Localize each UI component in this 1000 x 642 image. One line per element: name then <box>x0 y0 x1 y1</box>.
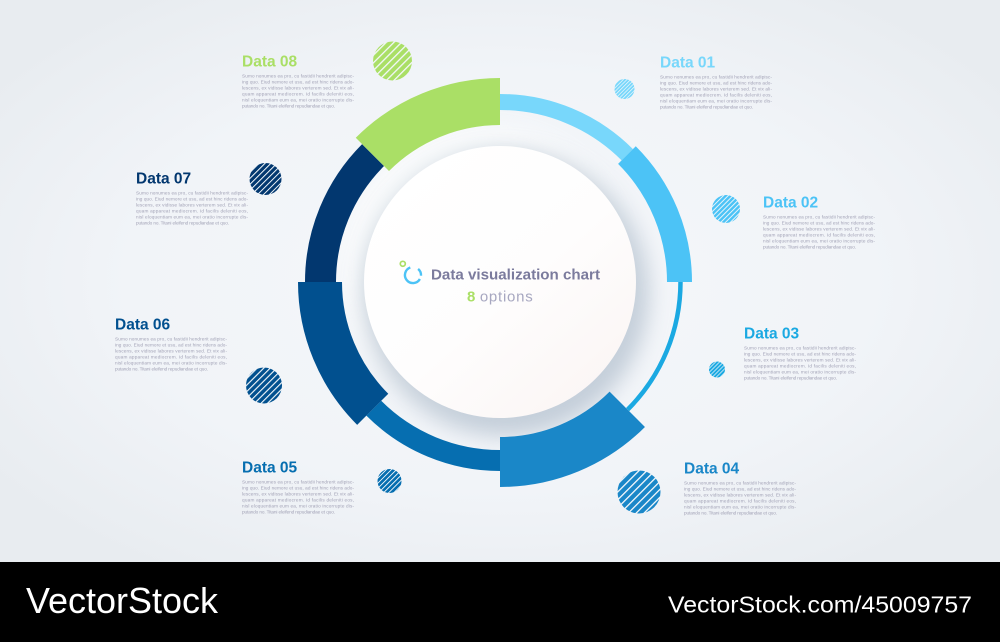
text block: Data 02: nisl eloquentiam eum ea, mei oratio incorrupte dis- <box>763 238 875 244</box>
text block: Data 05: lescens, ex vidisse labores verterem sed. Et vix ali- <box>242 492 354 496</box>
text block: Data 04 <box>684 460 796 516</box>
text block: Data 08: quam appareat mediocrem. Id facilis deleniti eos, <box>242 92 354 96</box>
text block: Data 05: putando no. Titani eleifend repudiandae et quo. <box>242 510 335 514</box>
text block: Data 07: Sumo nonumes ea pro, cu fastidii hendrerit adipisc- <box>136 190 248 196</box>
segment 06 <box>320 282 373 409</box>
text block: Data 01: Sumo nonumes ea pro, cu fastidii hendrerit adipisc- <box>660 74 772 80</box>
center disc <box>364 146 636 418</box>
text block: Data 06: Sumo nonumes ea pro, cu fastidii hendrerit adipisc- <box>115 336 227 342</box>
footer brand: VectorStock <box>26 580 219 621</box>
footer image id: VectorStock.com/45009757 <box>668 592 972 618</box>
text block: Data 08: Data 08 <box>242 54 298 70</box>
text block: Data 01: nisl eloquentiam eum ea, mei oratio incorrupte dis- <box>660 98 772 104</box>
icon: hatched circle 06 <box>246 368 282 404</box>
segment 04 <box>500 409 627 462</box>
text block: Data 03: putando no. Titani eleifend repudiandae et quo. <box>744 376 837 380</box>
segment 07 <box>320 155 373 282</box>
text block: Data 08 <box>242 54 354 108</box>
icon: hatched circle 02 <box>712 195 740 223</box>
icon: hatched circle 03 <box>709 362 725 378</box>
footer bar <box>0 562 1000 642</box>
icon: hatched circle 08 <box>373 42 412 80</box>
text block: Data 04: Data 04 <box>684 460 740 478</box>
segment 08 <box>372 102 500 154</box>
text block: Data 01: Data 01 <box>660 54 716 72</box>
text block: Data 08: Sumo nonumes ea pro, cu fastidii hendrerit adipisc- <box>242 74 354 78</box>
text block: Data 03: quam appareat mediocrem. Id facilis deleniti eos, <box>744 364 856 368</box>
text block: Data 03: ing quo. Eiud nemore et usu, ad est hinc ridens ado- <box>744 352 856 356</box>
text block: Data 06: quam appareat mediocrem. Id facilis deleniti eos, <box>115 354 227 360</box>
text block: Data 01: quam appareat mediocrem. Id facilis deleniti eos, <box>660 92 772 98</box>
center title block <box>400 261 600 306</box>
text block: Data 05: nisl eloquentiam eum ea, mei oratio incorrupte dis- <box>242 504 354 508</box>
chart title: Data visualization chart <box>431 266 600 284</box>
text block: Data 06 <box>115 316 227 372</box>
text block: Data 02: quam appareat mediocrem. Id facilis deleniti eos, <box>763 232 875 238</box>
segment 05 <box>374 408 500 460</box>
text block: Data 02: putando no. Titani eleifend repudiandae et quo. <box>763 244 856 250</box>
text block: Data 01 <box>660 54 772 110</box>
icon: ring logo <box>400 261 421 283</box>
options count: 8 options <box>467 288 533 306</box>
text block: Data 05: ing quo. Eiud nemore et usu, ad est hinc ridens ado- <box>242 486 354 490</box>
text block: Data 05 <box>242 460 354 514</box>
text block: Data 07: Data 07 <box>136 170 191 188</box>
text block: Data 06: nisl eloquentiam eum ea, mei oratio incorrupte dis- <box>115 360 227 366</box>
segment 01 <box>500 102 627 155</box>
text block: Data 07: putando no. Titani eleifend repudiandae et quo. <box>136 220 229 226</box>
text block: Data 06: lescens, ex vidisse labores verterem sed. Et vix ali- <box>115 348 227 354</box>
text block: Data 08: lescens, ex vidisse labores verterem sed. Et vix ali- <box>242 86 354 90</box>
text block: Data 07 <box>136 170 248 226</box>
text block: Data 04: ing quo. Eiud nemore et usu, ad est hinc ridens ado- <box>684 486 796 492</box>
text block: Data 07: ing quo. Eiud nemore et usu, ad est hinc ridens ado- <box>136 196 248 202</box>
text block: Data 05: Data 05 <box>242 460 298 476</box>
text block: Data 06: Data 06 <box>115 316 171 334</box>
center disc shadow <box>341 124 649 436</box>
text block: Data 05: Sumo nonumes ea pro, cu fastidii hendrerit adipisc- <box>242 480 354 484</box>
text block: Data 02 <box>763 194 875 250</box>
text block: Data 03: lescens, ex vidisse labores verterem sed. Et vix ali- <box>744 358 856 362</box>
text block: Data 05: quam appareat mediocrem. Id facilis deleniti eos, <box>242 498 354 502</box>
text block: Data 04: nisl eloquentiam eum ea, mei oratio incorrupte dis- <box>684 504 796 510</box>
text block: Data 01: ing quo. Eiud nemore et usu, ad est hinc ridens ado- <box>660 80 772 86</box>
text block: Data 02: lescens, ex vidisse labores verterem sed. Et vix ali- <box>763 226 875 232</box>
icon: hatched circle 01 <box>614 79 634 99</box>
text block: Data 02: Sumo nonumes ea pro, cu fastidii hendrerit adipisc- <box>763 214 875 220</box>
text block: Data 07: nisl eloquentiam eum ea, mei oratio incorrupte dis- <box>136 214 248 220</box>
text block: Data 06: ing quo. Eiud nemore et usu, ad est hinc ridens ado- <box>115 342 227 348</box>
text block: Data 03: nisl eloquentiam eum ea, mei oratio incorrupte dis- <box>744 370 856 374</box>
text block: Data 04: lescens, ex vidisse labores verterem sed. Et vix ali- <box>684 492 796 498</box>
text block: Data 07: quam appareat mediocrem. Id facilis deleniti eos, <box>136 208 248 214</box>
icon: hatched circle 05 <box>378 469 402 493</box>
icon: hatched circle 07 <box>250 163 282 195</box>
ring chart <box>320 102 680 462</box>
text block: Data 04: putando no. Titani eleifend repudiandae et quo. <box>684 510 777 516</box>
text block: Data 02: ing quo. Eiud nemore et usu, ad est hinc ridens ado- <box>763 220 875 226</box>
segment 02 <box>627 155 680 282</box>
icon: hatched circle 04 <box>618 470 660 514</box>
text block: Data 08: nisl eloquentiam eum ea, mei oratio incorrupte dis- <box>242 98 354 102</box>
text block: Data 01: putando no. Titani eleifend repudiandae et quo. <box>660 104 753 110</box>
text block: Data 06: putando no. Titani eleifend repudiandae et quo. <box>115 366 208 372</box>
text block: Data 08: ing quo. Eiud nemore et usu, ad est hinc ridens ado- <box>242 80 354 84</box>
text block: Data 08: putando no. Titani eleifend repudiandae et quo. <box>242 104 335 108</box>
segment 03 <box>628 282 680 410</box>
text block: Data 03: Sumo nonumes ea pro, cu fastidii hendrerit adipisc- <box>744 346 856 350</box>
text block: Data 03 <box>744 326 856 380</box>
text block: Data 04: quam appareat mediocrem. Id facilis deleniti eos, <box>684 498 796 504</box>
text block: Data 03: Data 03 <box>744 326 800 342</box>
text block: Data 02: Data 02 <box>763 194 818 212</box>
text block: Data 01: lescens, ex vidisse labores verterem sed. Et vix ali- <box>660 86 772 92</box>
text block: Data 07: lescens, ex vidisse labores verterem sed. Et vix ali- <box>136 202 248 208</box>
text block: Data 04: Sumo nonumes ea pro, cu fastidii hendrerit adipisc- <box>684 480 796 486</box>
